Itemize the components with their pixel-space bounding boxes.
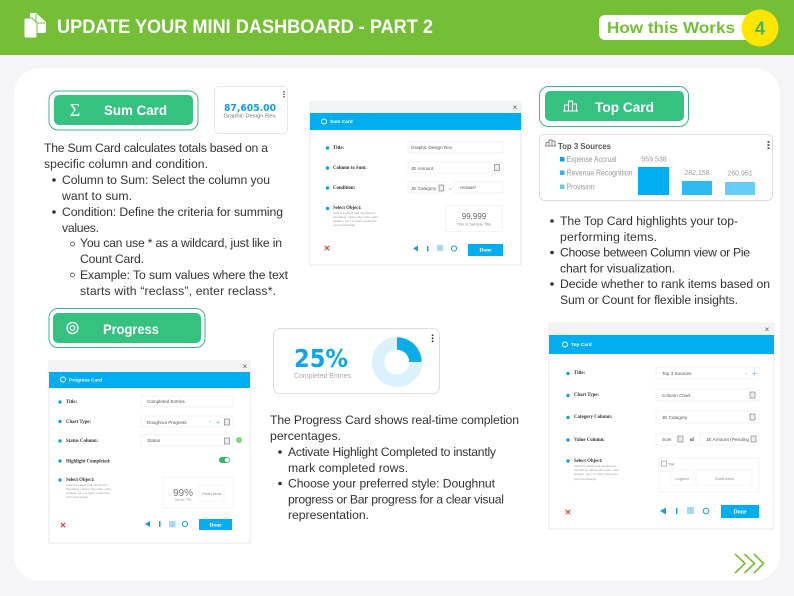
dialog: top card: formatting options (font size, color, <box>574 468 620 472</box>
icon: documents <box>24 13 46 38</box>
panel: progress button: Progress <box>103 321 159 337</box>
dialog: progress card: Chart Type: <box>66 420 91 425</box>
kpi card: 25% doughnut: Completed Entries <box>294 371 351 380</box>
dialog: sum card: your card design. <box>333 223 356 227</box>
dialog: sum card: position, etc.) to freely customize <box>333 219 377 223</box>
title: UPDATE YOUR MINI DASHBOARD - PART 2 <box>57 16 433 38</box>
dialog: progress card: Status <box>147 438 161 443</box>
bars: 559,538 <box>641 156 667 164</box>
text block: progress description: representation. <box>288 508 369 522</box>
dialog: top card <box>549 323 774 529</box>
bars: 260,951 <box>727 170 753 178</box>
dialog: progress card: Highlight Completed: <box>66 460 111 464</box>
text block: top card description: Choose between Column view or Pie <box>560 246 750 260</box>
text block: sum card description: Example: To sum values where the text <box>80 268 289 282</box>
text block: sum card description: specific column and condition. <box>44 157 208 171</box>
kpi card: sum value: Graphic Design Rev. <box>223 114 277 120</box>
how this works badge: How this Works <box>607 20 735 37</box>
dialog: progress card: - <box>209 419 212 426</box>
kpi card: sum value: 87,605.00 <box>224 103 276 114</box>
text block: progress description: The Progress Card shows real-time completion <box>270 413 519 427</box>
dialog: top card: Done <box>733 510 747 516</box>
text block: sum card description <box>44 141 289 298</box>
dialog: progress card: Completed Entries <box>147 399 185 404</box>
dialog: sum card <box>310 102 521 265</box>
dialog: top card: Title <box>668 462 675 466</box>
bars: 282,158 <box>684 170 710 177</box>
dialog: top card: Chart Area <box>714 476 734 481</box>
panel: top card button <box>540 86 688 126</box>
dialog: top card: position, etc.) to freely customize <box>574 472 618 476</box>
dialog: top card: JE Category <box>662 415 688 420</box>
text block: sum card description: You can use * as a wildcard, just like in <box>80 236 282 250</box>
dialog: top card: Title: <box>574 371 586 376</box>
dialog: sum card: Done <box>479 248 492 254</box>
chart card: top 3 sources <box>540 134 772 200</box>
dialog: top card: Select Object: <box>574 459 603 464</box>
legend <box>560 155 632 192</box>
dialog: top card: your card design. <box>574 477 597 481</box>
header banner <box>0 0 794 55</box>
text block: sum card description: starts with “reclass”, enter reclass*. <box>80 284 276 298</box>
text block: top card description: The Top Card highlights your top- <box>560 214 738 228</box>
dialog: sum card: JE Amount <box>411 166 434 171</box>
dialog: top card: Top 3 Sources <box>662 371 692 376</box>
icon: column glyph <box>545 140 556 146</box>
text block: progress description: mark completed rows. <box>288 461 408 475</box>
doughnut <box>378 337 422 381</box>
dialog: progress card: Title: <box>66 400 78 405</box>
text block: progress description: percentages. <box>270 429 341 443</box>
dialog: progress card: 99% <box>173 488 193 499</box>
dialog: top card: Click the object and use Excel's <box>574 464 617 468</box>
dialog: progress card: formatting options (font size, color, <box>66 487 112 491</box>
dialog: sum card: Column to Sum: <box>333 166 367 171</box>
kpi card: 25% doughnut <box>274 328 440 394</box>
dialog: progress card: Click the object and use Excel's <box>66 483 109 487</box>
dialog: sum card: This is Sample Title <box>457 222 492 226</box>
text block: sum card description: Column to Sum: Select the column you <box>62 173 270 187</box>
dialog: sum card: ✕ <box>324 244 330 253</box>
dialog: progress card <box>49 361 250 543</box>
text block: sum card description: want to sum. <box>61 189 132 203</box>
dialog: top card: × <box>765 325 770 334</box>
dialog: sum card: = <box>449 186 452 191</box>
text block: progress description: Choose your preferred style: Doughnut <box>288 476 496 490</box>
text block: sum card description: Condition: Define the criteria for summing <box>62 205 283 219</box>
dialog: sum card: formatting options (font size, color, <box>333 215 379 219</box>
chart card: top 3 sources: Top 3 Sources <box>558 142 612 151</box>
text block: sum card description: Count Card. <box>80 252 144 266</box>
dialog: top card: Sum <box>662 437 672 442</box>
panel: sum card button: Σ <box>70 100 80 120</box>
panel: progress button <box>49 308 205 348</box>
dialog: sum card: 99,999 <box>462 212 487 221</box>
dialog: sum card: Sum Card <box>330 119 353 125</box>
panel: sum card button <box>49 91 198 130</box>
text block: progress description: progress or Bar progress for a clear visual <box>288 492 504 506</box>
dialog: progress card: Done <box>209 522 222 528</box>
dialog: progress card: Select Object: <box>66 478 95 483</box>
dialog: top card: of <box>690 438 694 443</box>
legend: Expense Accrual <box>566 155 617 164</box>
dialog: sum card: Graphic Design Rev. <box>411 145 453 150</box>
dialog: progress card: × <box>243 362 248 371</box>
legend: Provision <box>566 182 594 192</box>
dialog: sum card: reclass* <box>460 185 477 190</box>
dialog: progress card: Chart Area <box>202 491 222 496</box>
dialog: sum card: × <box>513 103 518 112</box>
dialog: progress card: position, etc.) to freely customize <box>66 491 110 495</box>
dialog: top card: Value Column: <box>574 438 605 443</box>
text block: top card description: Sum or Count for flexible insights. <box>560 293 738 307</box>
dialog: sum card: Condition: <box>333 186 356 191</box>
arrow: next chevrons <box>735 554 764 573</box>
dialog: progress card: Status Column: <box>66 439 99 444</box>
dialog: top card: Legend <box>675 476 689 481</box>
text block: sum card description: values. <box>62 221 99 235</box>
kpi card: sum value <box>214 86 288 134</box>
text block: progress description <box>270 413 519 522</box>
dialog: top card: - <box>745 371 748 378</box>
dialog: sum card: Click the object and use Excel's <box>333 211 376 215</box>
dialog: top card: Column Chart <box>662 393 691 398</box>
how this works badge: 4 <box>755 18 765 38</box>
dialog: top card: JE Amount (Pending <box>706 437 749 442</box>
dialog: top card: Top Card <box>571 342 592 348</box>
dialog: progress card: + <box>216 420 220 426</box>
text block: top card description: Decide whether to rank items based on <box>560 277 770 291</box>
dialog: top card: + <box>752 369 757 378</box>
dialog: top card: Chart Type: <box>574 393 599 398</box>
text block: progress description: Activate Highlight Completed to instantly <box>288 445 497 459</box>
text block: top card description: chart for visualization. <box>560 262 675 276</box>
kpi card: 25% doughnut: 25% <box>294 344 348 373</box>
text block: sum card description: The Sum Card calculates totals based on a <box>44 141 268 155</box>
dialog: progress card: Sample Title <box>175 498 192 502</box>
dialog: progress card: ✕ <box>60 521 66 530</box>
dialog: sum card: JE Category <box>411 186 437 191</box>
dialog: progress card: Progress Card <box>69 378 102 384</box>
dialog: top card: Category Column: <box>574 415 613 420</box>
dialog: top card: ✕ <box>565 508 571 517</box>
bars <box>638 156 755 195</box>
dialog: progress card: your card design. <box>66 495 89 499</box>
dialog: progress card: Doughnut Progress <box>147 420 187 425</box>
dialog: sum card: Title: <box>333 146 345 151</box>
how this works badge <box>599 10 778 46</box>
dialog: sum card: Select Object: <box>333 206 362 211</box>
panel: top card button: Top Card <box>595 99 654 115</box>
text block: top card description <box>550 214 770 307</box>
panel: sum card button: Sum Card <box>104 102 167 118</box>
legend: Revenue Recognition <box>566 168 632 178</box>
text block: top card description: performing items. <box>560 230 657 244</box>
